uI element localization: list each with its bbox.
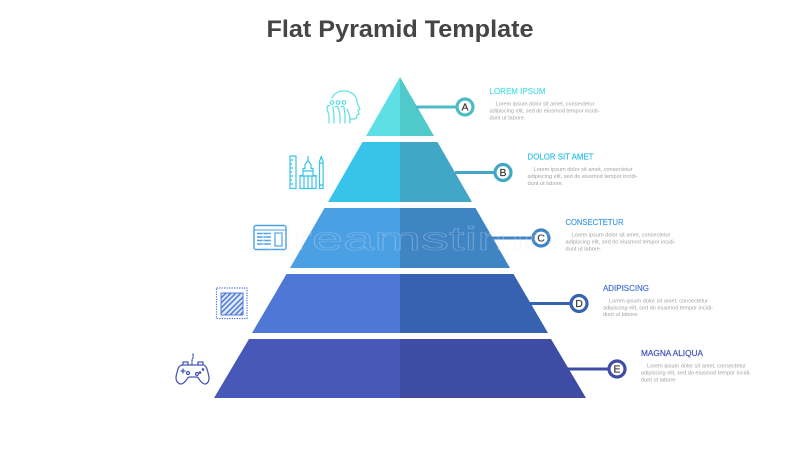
text block B: DOLOR SIT AMET bbox=[528, 152, 594, 162]
connector and badge E: E bbox=[613, 364, 621, 376]
connector and badge C: C bbox=[537, 233, 545, 245]
connector and badge A bbox=[416, 99, 473, 115]
tier B bbox=[328, 142, 472, 202]
watermark: dreamstime bbox=[262, 220, 555, 257]
tier D bbox=[252, 274, 548, 333]
text block E: dunt ut labore. bbox=[641, 377, 677, 383]
text block C: Lorem ipsum dolor sit amet, consectetur bbox=[572, 233, 671, 239]
icon: head with people bbox=[327, 91, 360, 123]
text block D: Lorem ipsum dolor sit amet, consectetur bbox=[609, 298, 708, 304]
text block B: adipiscing elit, sed do eiusmod tempor incidi- bbox=[528, 174, 638, 180]
icon: browser window bbox=[254, 226, 286, 250]
pyramid bbox=[214, 77, 586, 398]
tier A bbox=[366, 77, 434, 136]
connector and badge D: D bbox=[575, 298, 583, 310]
text block D: ADIPISCING bbox=[603, 283, 649, 293]
text block B bbox=[528, 152, 638, 187]
connector and badge C bbox=[492, 230, 549, 246]
icon: hatched square with dotted frame bbox=[216, 288, 247, 318]
text block A: Lorem ipsum dolor sit amet, consectetur bbox=[496, 102, 595, 108]
connector and badge B bbox=[455, 164, 511, 180]
text block D: dunt ut labore. bbox=[603, 312, 639, 318]
text block E: MAGNA ALIQUA bbox=[641, 348, 703, 358]
tier C bbox=[290, 208, 510, 268]
connector and badge D bbox=[530, 296, 587, 312]
text block E: Lorem ipsum dolor sit amet, consectetur bbox=[647, 364, 746, 370]
connector and badge B: B bbox=[499, 167, 507, 179]
icon: ruler, building, pencil bbox=[290, 156, 323, 188]
icon: game controller bbox=[176, 354, 209, 384]
text block A: dunt ut labore. bbox=[490, 115, 526, 121]
text block D: adipiscing elit, sed do eiusmod tempor incidi- bbox=[603, 305, 713, 311]
text block E bbox=[641, 348, 751, 383]
text block D bbox=[603, 283, 713, 318]
text block C bbox=[566, 217, 676, 252]
connector and badge E bbox=[568, 361, 625, 377]
text block E: adipiscing elit, sed do eiusmod tempor incidi- bbox=[641, 370, 751, 376]
connector and badge A: A bbox=[461, 102, 469, 114]
text block A bbox=[490, 86, 600, 121]
text block B: Lorem ipsum dolor sit amet, consectetur bbox=[534, 167, 633, 173]
tier E bbox=[214, 339, 586, 398]
text block A: LOREM IPSUM bbox=[490, 86, 546, 96]
title: Flat Pyramid Template bbox=[266, 16, 534, 43]
text block C: adipiscing elit, sed do eiusmod tempor incidi- bbox=[566, 240, 676, 246]
text block C: CONSECTETUR bbox=[566, 217, 624, 227]
text block B: dunt ut labore. bbox=[528, 181, 564, 187]
text block C: dunt ut labore. bbox=[566, 246, 602, 252]
text block A: adipiscing elit, sed do eiusmod tempor incidi- bbox=[490, 108, 600, 114]
